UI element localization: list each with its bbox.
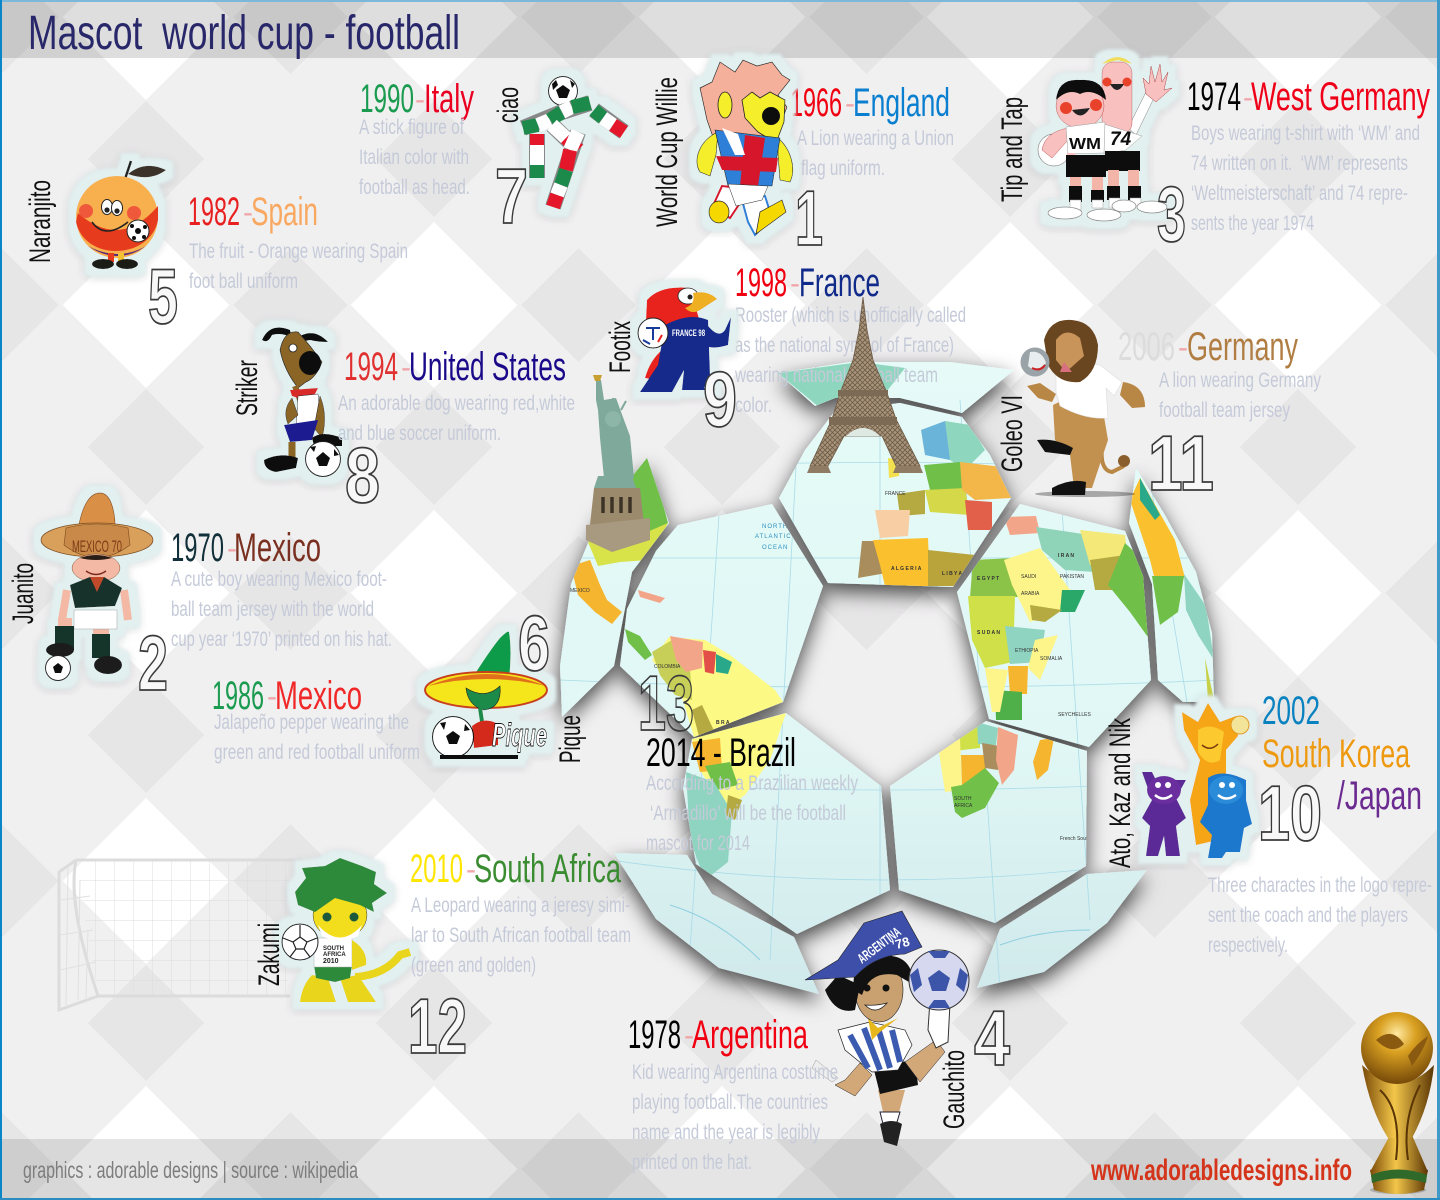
mascot 6: Pique (425, 632, 547, 759)
text block: 2006 Germany (1118, 325, 1321, 422)
text block: 1966 England: A Lion wearing a Union (797, 127, 954, 150)
vertical label: Tip and Tap: Tip and Tap (996, 97, 1029, 202)
text block: 1970 Mexico (171, 526, 392, 651)
map labels: B R A (716, 720, 730, 726)
text block: 1974 West Germany: sents the year 1974 (1191, 212, 1314, 235)
map labels: I R A N (1058, 553, 1074, 559)
icon: Statue of Liberty (586, 375, 650, 552)
text block: 1986 Mexico: - (267, 680, 277, 713)
mascot 12: Zakumi (282, 858, 410, 1002)
text block: 1998 France: color. (735, 394, 772, 417)
map: Middle East and East Africa (968, 516, 1150, 720)
map labels: NORTH (762, 524, 788, 530)
map: South Asia (1130, 478, 1214, 700)
map labels: SOUTH (954, 796, 972, 802)
number 9: 9 (703, 355, 737, 443)
text block: 2006 Germany: Germany (1187, 325, 1298, 369)
text block: 1982 Spain (188, 190, 408, 293)
text block: 2010 South Africa: South Africa (474, 847, 622, 891)
number 10: 10 (1258, 769, 1322, 857)
title: Mascot world cup - football (28, 7, 460, 60)
text block: 2014 Brazil: ‘Armadillo’ will be the football (650, 802, 846, 825)
text block: 1994 United States (338, 345, 575, 445)
text block: 1966 England (790, 81, 954, 180)
text block: 1974 West Germany: - (1243, 81, 1253, 114)
map labels: S U D A N (977, 630, 1000, 636)
text block: 1978 Argentina: 1978 (628, 1013, 681, 1057)
vertical label: World Cup Willie: World Cup Willie (651, 77, 684, 227)
mascot 2: Juanito (41, 493, 153, 680)
text block: 1998 France: France (799, 261, 880, 305)
number 6: 6 (518, 599, 550, 687)
vertical label: Striker: Striker (231, 360, 264, 416)
text block: 1990 Italy: - (415, 83, 425, 116)
text block: 1986 Mexico (212, 674, 420, 764)
vertical label: Gauchito: Gauchito (938, 1050, 971, 1129)
text block: 2010 South Africa: - (466, 853, 476, 886)
text block: 1990 Italy: Italian color with (359, 146, 469, 169)
vertical label: Goleo VI: Goleo VI (996, 395, 1029, 472)
number 11: 11 (1148, 419, 1214, 507)
text block: 1974 West Germany: 1974 (1187, 75, 1241, 119)
text block: 2002 South Korea / Japan: respectively. (1208, 934, 1288, 957)
icon: Eiffel Tower (807, 297, 923, 473)
text block: 1978 Argentina: playing football.The countries (632, 1091, 828, 1114)
number 5: 5 (148, 252, 178, 340)
number 2: 2 (138, 619, 168, 707)
text block: 1966 England: - (845, 87, 855, 120)
icon: goal net (59, 860, 302, 1010)
number 4: 4 (974, 994, 1010, 1082)
map labels: PAKISTAN (1060, 574, 1084, 580)
map labels: E G Y P T (977, 576, 999, 582)
text block: 1994 United States: An adorable dog wearing red,white (338, 392, 575, 415)
text block: 1970 Mexico: - (227, 532, 237, 565)
map labels: FRANCE (885, 491, 906, 497)
text block: 1966 England: flag uniform. (801, 157, 885, 180)
mascot 12: Zakumi: SOUTH (323, 946, 344, 952)
text block: 1998 France: - (790, 267, 800, 300)
text block: 1982 Spain: 1982 (188, 190, 240, 234)
map labels: ARABIA (1021, 591, 1040, 597)
mascot 2: Juanito: MEXICO 70 (72, 537, 122, 556)
map labels: AFRICA (954, 803, 973, 809)
map: Antarctica outline (670, 905, 1090, 960)
text block: 2010 South Africa: (green and golden) (411, 954, 536, 977)
text block: 1998 France: 1998 (735, 261, 787, 305)
text block: 1990 Italy: A stick figure of (359, 116, 464, 139)
map labels: ETHIOPIA (1015, 648, 1039, 654)
map labels: SAUDI (1021, 574, 1036, 580)
text block: 2010 South Africa (410, 847, 631, 977)
text block: 1978 Argentina (628, 1013, 838, 1174)
map labels: OCEAN (762, 545, 788, 551)
text block: 1990 Italy (359, 77, 474, 199)
map labels: L I B Y A (942, 571, 962, 577)
text block: 2006 Germany: 2006 (1118, 325, 1175, 369)
map labels (570, 491, 1097, 842)
text block: 1970 Mexico: cup year ‘1970’ printed on his hat. (171, 628, 392, 651)
mascot 4: Gauchito (805, 911, 969, 1146)
mascot 9: Footix: FRANCE 98 (672, 328, 705, 338)
footer credit: graphics : adorable designs | source : wikipedia (23, 1157, 358, 1183)
mascot 1: World Cup Willie (697, 60, 793, 235)
text block: 1986 Mexico: Jalapeño pepper wearing the (214, 711, 409, 734)
mascot 4: Gauchito: ’78 (890, 934, 911, 953)
number 1: 1 (795, 174, 823, 262)
text block: 1970 Mexico: ball team jersey with the world (171, 598, 374, 621)
text block: 1978 Argentina: Argentina (692, 1013, 809, 1057)
vertical label: Naranjito: Naranjito (24, 180, 57, 263)
text block: 2010 South Africa: lar to South African football team (411, 924, 631, 947)
text block: 1974 West Germany (1187, 75, 1430, 235)
footer band (0, 1139, 1440, 1200)
mascot 12: Zakumi: 2010 (323, 958, 339, 965)
text block: 1998 France: wearing national football team (734, 364, 938, 387)
text block: 2006 Germany: football team jersey (1159, 399, 1290, 422)
text block: 1990 Italy: football as head. (359, 176, 470, 199)
text block: 2006 Germany: A lion wearing Germany (1159, 369, 1321, 392)
map: South America (652, 636, 786, 880)
number 8: 8 (345, 431, 380, 519)
map labels: French Southern (1060, 836, 1097, 842)
map labels: A L G E R I A (891, 566, 922, 572)
map labels: SEYCHELLES (1058, 712, 1091, 718)
map: Greenland cap (778, 362, 905, 408)
text block: 1966 England: England (853, 81, 950, 125)
text block: 2010 South Africa: A Leopard wearing a jeresy simi- (411, 894, 630, 917)
mascot 4: Gauchito: ARGENTINA (854, 924, 904, 966)
number 3: 3 (1157, 170, 1186, 258)
map: Europe and North Africa (858, 421, 1011, 586)
text block: 2014 Brazil (646, 731, 858, 855)
text block: 1994 United States: and blue soccer uniform. (338, 422, 501, 445)
header band (0, 0, 1440, 58)
text block: 1986 Mexico: Mexico (275, 674, 362, 718)
text block: 2014 Brazil: mascot for 2014 (646, 832, 750, 855)
mascot 5: Naranjito (76, 161, 166, 269)
map labels: ATLANTIC (755, 534, 792, 540)
text block: 1978 Argentina: printed on the hat. (632, 1151, 752, 1174)
mascot 8: Striker (262, 328, 342, 476)
mascot 11: Goleo VI (1020, 320, 1145, 497)
text block: 2002 South Korea / Japan (1208, 689, 1432, 957)
mascot 3: Tip and Tap: WM (1069, 136, 1101, 153)
map labels: MEXICO (570, 588, 590, 594)
number 13 over globe: 13 (638, 659, 694, 747)
vertical label: Ato, Kaz and Nik: Ato, Kaz and Nik (1104, 717, 1137, 868)
text block: 1978 Argentina: Kid wearing Argentina costume (632, 1061, 838, 1084)
mascot 7: Ciao (523, 76, 624, 207)
mascot 12: Zakumi: AFRICA (323, 952, 346, 958)
vertical label: Footix: Footix (604, 321, 637, 373)
text block: 1978 Argentina: name and the year is legibly (632, 1121, 820, 1144)
text block: 1990 Italy: 1990 (360, 77, 414, 121)
text block: 1982 Spain: - (243, 196, 253, 229)
text block: 1990 Italy: Italy (424, 77, 474, 121)
text block: 1970 Mexico: 1970 (171, 526, 224, 570)
map labels: SOMALIA (1040, 656, 1063, 662)
map labels: COLOMBIA (654, 664, 681, 670)
number 7: 7 (495, 152, 528, 240)
text block: 2006 Germany: - (1178, 331, 1188, 364)
mascot 6: Pique: Pique (492, 717, 547, 753)
text block: 1982 Spain: foot ball uniform (189, 270, 298, 293)
vertical label: Pique: Pique (554, 715, 587, 763)
vertical label: Zakumi: Zakumi (253, 923, 286, 986)
text block: 1994 United States: United States (409, 345, 566, 389)
map graticule (560, 380, 1220, 1000)
text block: 2010 South Africa: 2010 (410, 847, 463, 891)
text block: 1982 Spain: The fruit - Orange wearing Spain (189, 240, 408, 263)
text block: 1994 United States: - (401, 351, 411, 384)
text block: 1966 England: 1966 (790, 81, 842, 125)
map: Southern Africa (937, 720, 1054, 818)
mascot 3: Tip and Tap: 74 (1110, 129, 1132, 150)
mascot 3: Tip and Tap (1038, 57, 1172, 221)
map: North America (571, 452, 668, 660)
text block: 2014 Brazil: 2014 - Brazil (646, 731, 796, 775)
vertical label: ciao: ciao (492, 87, 525, 123)
mascot 10: Ato, Kaz and Nik (1142, 703, 1252, 858)
text block: 1970 Mexico: A cute boy wearing Mexico foot- (171, 568, 387, 591)
text block: 2002 South Korea / Japan: 2002 (1262, 689, 1320, 733)
text block: 1986 Mexico: green and red football uniform (214, 741, 420, 764)
vertical label: Juanito: Juanito (7, 563, 40, 624)
text block: 1998 France (734, 261, 966, 417)
icon: World Cup trophy (1361, 1012, 1434, 1194)
text block: 2014 Brazil: According to a Brazilian weekly (646, 772, 858, 795)
football globe made of map panels (540, 350, 1240, 1010)
mascot 9: Footix (638, 288, 731, 392)
text block: 1970 Mexico: Mexico (234, 526, 321, 570)
text block: 1998 France: as the national symbol of France) (735, 334, 954, 357)
text block: 1982 Spain: Spain (251, 190, 318, 234)
text block: 1978 Argentina: - (684, 1019, 694, 1052)
text block: 1998 France: Rooster (which is unofficially called (735, 304, 966, 327)
text block: 1994 United States: 1994 (344, 345, 398, 389)
text block: 1986 Mexico: 1986 (212, 674, 264, 718)
number 12: 12 (408, 982, 467, 1070)
ocean (540, 350, 1240, 1010)
